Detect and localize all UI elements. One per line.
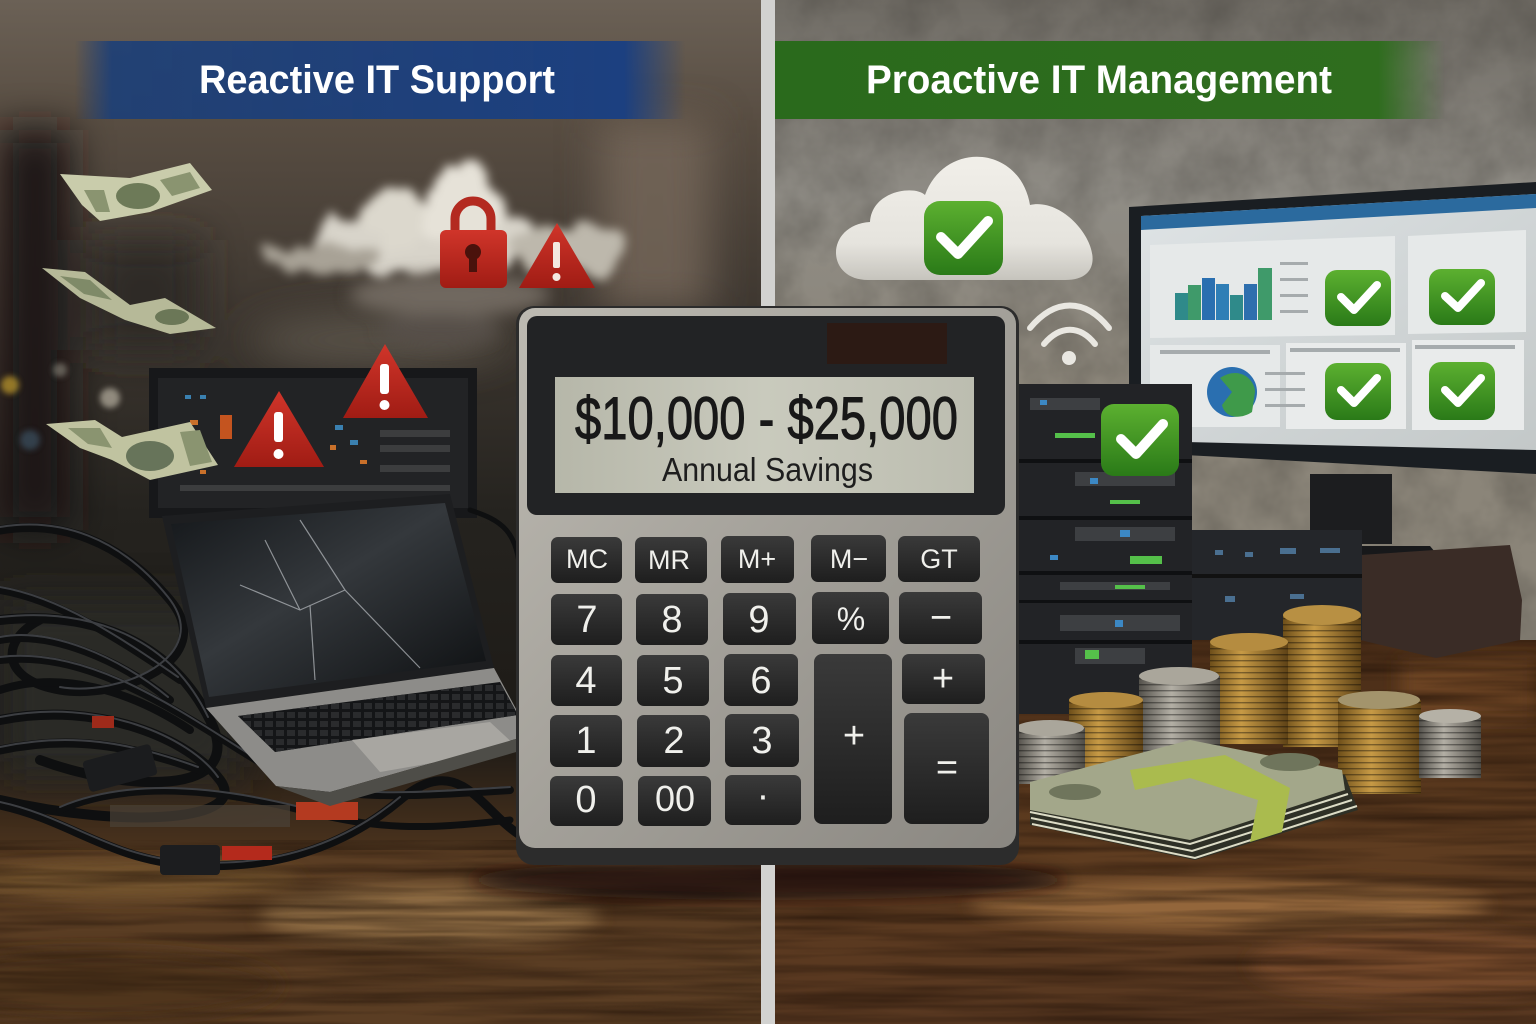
banner: proactive heading: Proactive IT Management <box>866 58 1332 102</box>
icon: check on cloud <box>924 201 1003 275</box>
calculator keypad: 7 <box>576 599 598 641</box>
calculator keypad: 1 <box>575 720 597 762</box>
calculator keypad: = <box>936 747 958 789</box>
illustration: cable connectors <box>82 716 358 875</box>
calculator keypad: − <box>930 597 952 639</box>
panel: dashboard monitor <box>1129 182 1536 558</box>
calculator keypad: 6 <box>750 660 772 702</box>
illustration: cracked laptop <box>162 494 530 806</box>
banner: reactive heading <box>75 41 685 119</box>
icon: warning triangle large left <box>234 391 324 467</box>
icon: red padlock <box>440 201 507 288</box>
chart: bar chart on monitor <box>1175 268 1272 320</box>
icon: warning triangle on cloud <box>519 223 595 288</box>
panel: desktop unit and small rack <box>1192 530 1522 658</box>
calculator keypad: + <box>932 658 954 700</box>
calculator keypad: MC <box>566 544 608 574</box>
shadow: calculator on table <box>468 860 1068 900</box>
icon: flying dollar bills <box>42 163 218 480</box>
panel: failing server rack <box>149 368 477 518</box>
calculator keypad: · <box>757 775 769 817</box>
panel: reactive IT background <box>0 0 762 1024</box>
calculator keypad: 00 <box>655 778 695 819</box>
calculator keypad: GT <box>920 544 958 574</box>
calculator keypad: M+ <box>738 544 776 574</box>
illustration: tangled cables <box>0 510 520 866</box>
calculator keypad: 9 <box>748 599 770 641</box>
calculator keypad: 5 <box>662 660 684 702</box>
calculator keypad: % <box>837 601 865 637</box>
icon: stormy cloud <box>265 165 625 346</box>
calculator keypad: + <box>843 715 865 757</box>
chart: pie chart on monitor <box>1207 367 1257 417</box>
banner: proactive heading <box>775 41 1445 119</box>
calculator keypad: 2 <box>663 720 685 762</box>
divider <box>761 0 775 1024</box>
panel: proactive IT background <box>775 0 1536 1024</box>
panel: healthy server rack <box>1010 384 1192 714</box>
illustration: coin stacks <box>1016 605 1481 794</box>
icon: warning triangle large right <box>343 344 428 418</box>
calculator top panel <box>527 316 1005 515</box>
solar cell <box>827 323 947 364</box>
calculator keypad: 0 <box>575 779 597 821</box>
panel: calculator <box>516 306 1019 865</box>
text lines on monitor <box>1160 262 1515 407</box>
calculator keypad: MR <box>648 545 690 575</box>
icon: monitor checks <box>1325 269 1495 420</box>
banner: reactive heading: Reactive IT Support <box>199 58 555 102</box>
icon: wifi <box>1030 306 1109 365</box>
calculator keypad: 8 <box>661 599 683 641</box>
calculator keypad: M− <box>830 544 868 574</box>
LCD display: $10,000 - $25,000 <box>575 385 958 452</box>
LCD display: Annual Savings <box>662 451 873 488</box>
icon: rack check <box>1101 404 1179 476</box>
LCD display <box>555 377 974 493</box>
illustration: banded cash stack <box>1030 740 1358 860</box>
calculator keypad: 3 <box>751 720 773 762</box>
icon: healthy cloud <box>836 157 1093 280</box>
calculator keypad: 4 <box>575 660 597 702</box>
calculator keypad <box>550 535 989 826</box>
